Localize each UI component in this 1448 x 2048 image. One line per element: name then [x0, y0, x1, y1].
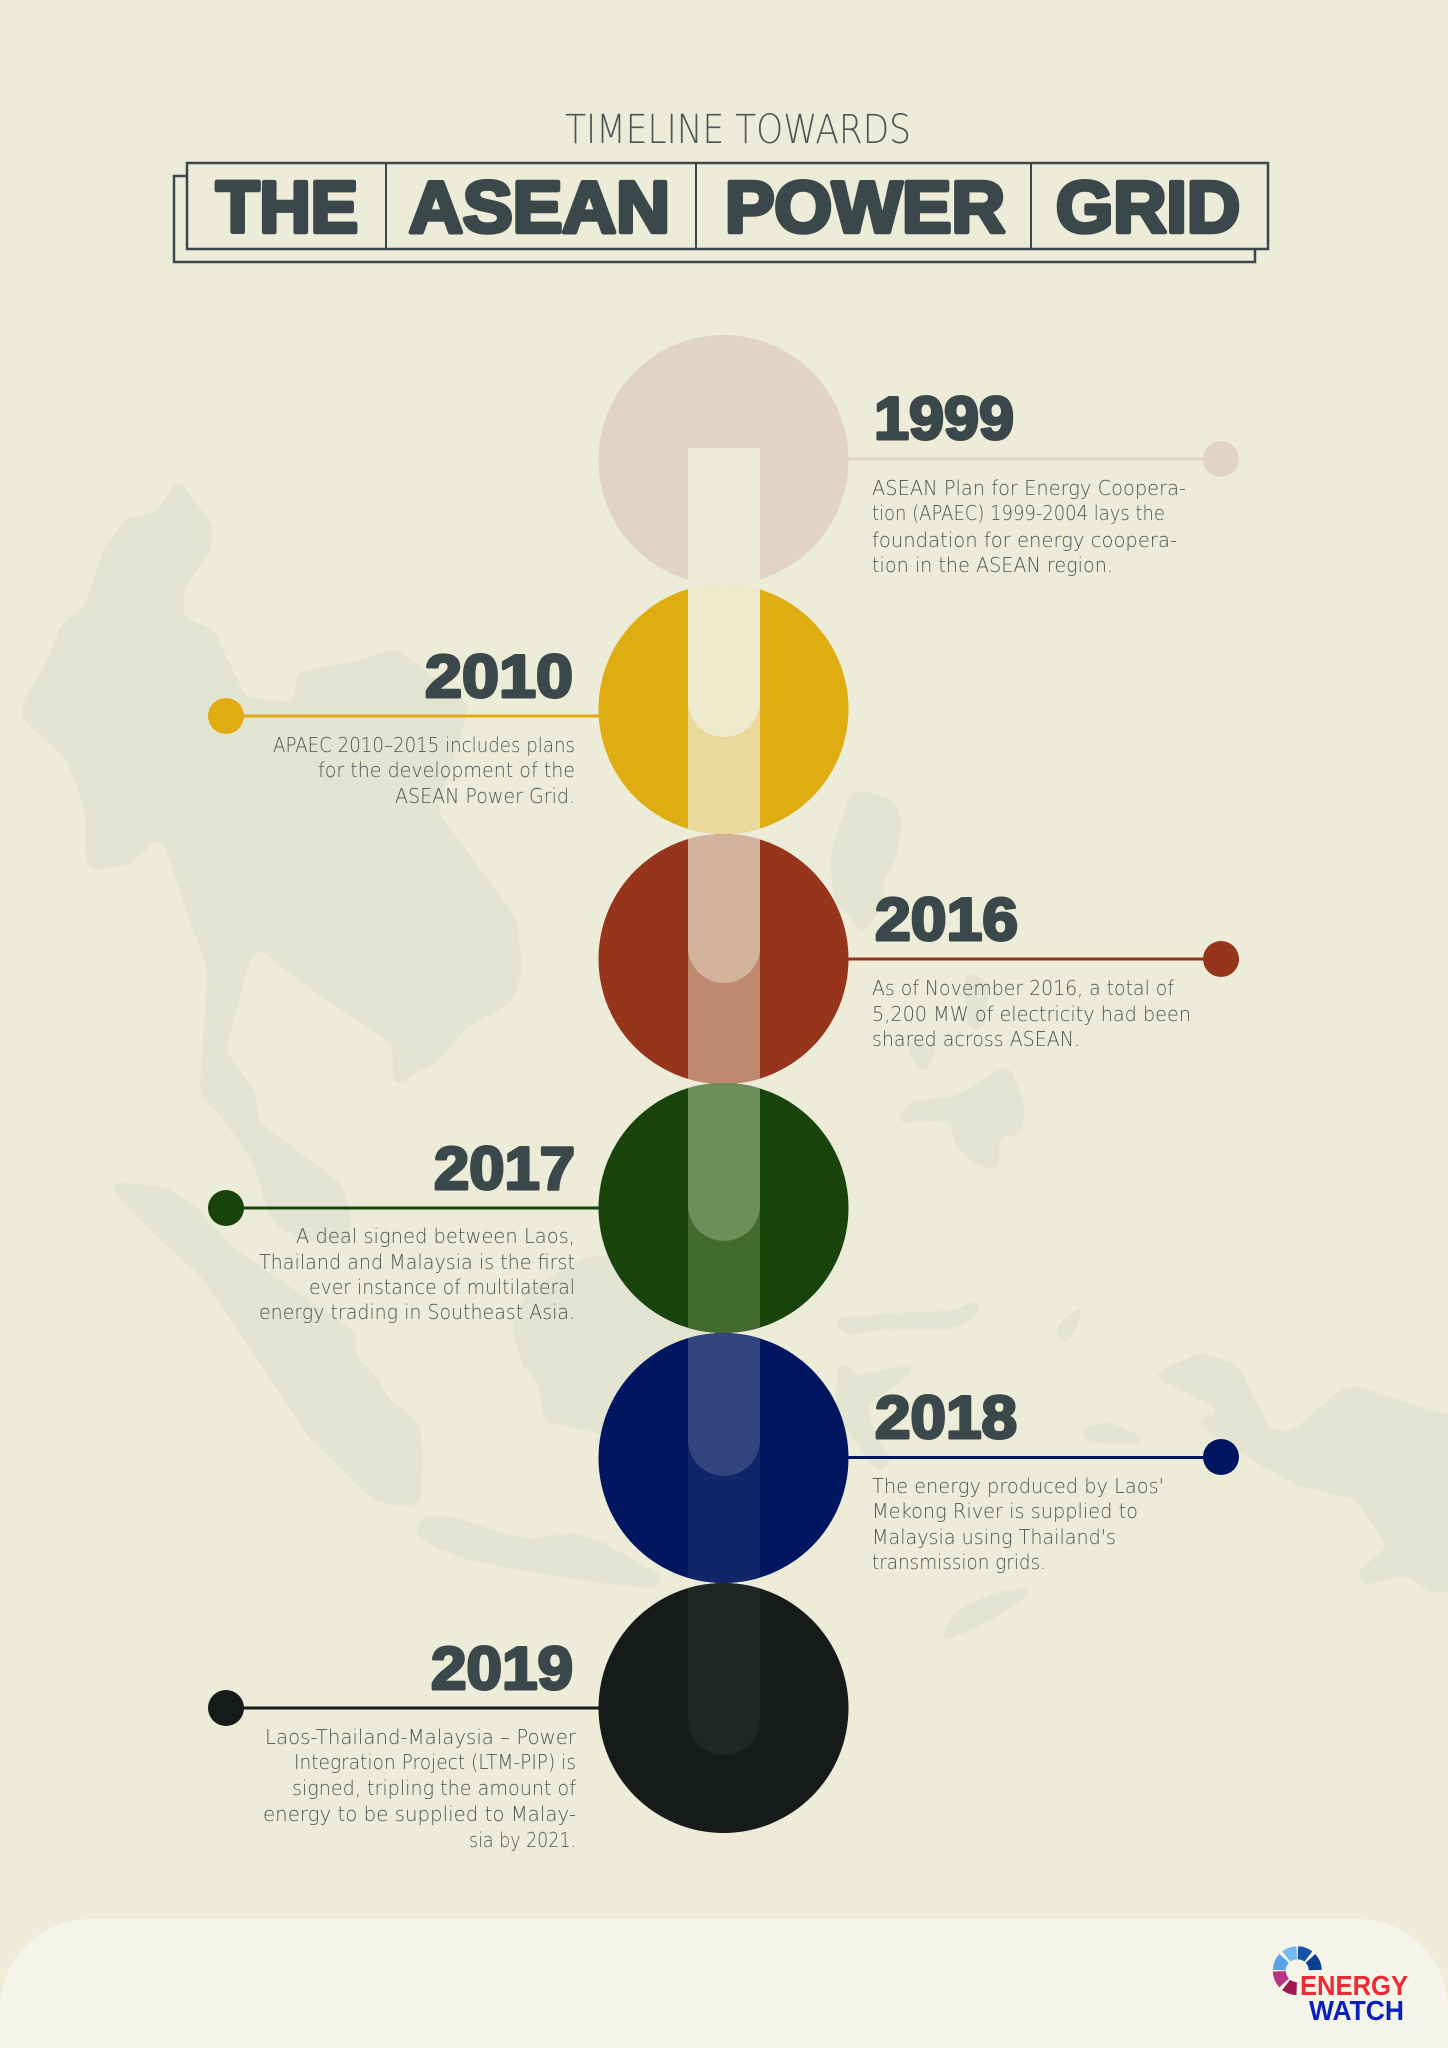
- description: 5,200 MW of electricity had been: [872, 1002, 1191, 1026]
- title word: THE: THE: [216, 168, 358, 248]
- connector line: [240, 1206, 602, 1210]
- timeline circle: [598, 1333, 848, 1583]
- map: Flores sliver: [943, 1589, 1032, 1640]
- end dot: [1203, 941, 1239, 977]
- logo ring icon: [1279, 1953, 1315, 1989]
- end dot: [1203, 441, 1239, 477]
- map: Borneo: [514, 1259, 720, 1440]
- connector line: [240, 1706, 602, 1710]
- milestone 2010: [208, 570, 848, 834]
- description: [263, 1725, 577, 1852]
- footer panel: [0, 1919, 1448, 2048]
- description: ASEAN Plan for Energy Coopera-: [872, 476, 1186, 500]
- description: [273, 733, 575, 808]
- connector line: [848, 1456, 1208, 1459]
- timeline circle: [598, 584, 848, 834]
- map: Java: [417, 1517, 660, 1586]
- capsule overlay: [688, 820, 760, 983]
- title banner: [174, 163, 1268, 262]
- description: [259, 1224, 575, 1324]
- description: Mekong River is supplied to: [872, 1499, 1138, 1523]
- banner dividers: [386, 163, 1031, 249]
- timeline circle: [598, 1083, 848, 1333]
- end dot: [1203, 1439, 1239, 1475]
- map: Panay island: [908, 1045, 935, 1072]
- connector line: [848, 958, 1208, 960]
- logo wordmark bottom: WATCH: [1309, 1995, 1404, 2026]
- year: 1999: [874, 385, 1014, 452]
- end dot: [208, 1190, 244, 1226]
- map: Luzon: [833, 793, 900, 931]
- capsule overlay: [688, 570, 760, 737]
- title eyebrow: TIMELINE TOWARDS: [565, 107, 911, 153]
- description: [872, 476, 1186, 577]
- description: energy to be supplied to Malay-: [263, 1802, 576, 1826]
- lower band: [688, 834, 760, 1084]
- description: Malaysia using Thailand's: [872, 1525, 1116, 1549]
- banner front frame: [187, 163, 1268, 249]
- description: As of November 2016, a total of: [872, 976, 1174, 1000]
- milestone 1999: [598, 335, 1239, 580]
- end dot: [208, 698, 244, 734]
- logo wordmark top: ENERGY: [1300, 1970, 1408, 2001]
- description: Laos-Thailand-Malaysia – Power: [265, 1725, 577, 1749]
- description: tion (APAEC) 1999-2004 lays the: [872, 501, 1165, 525]
- year: 2017: [434, 1135, 575, 1202]
- description: ASEAN Power Grid.: [395, 784, 575, 808]
- capsule overlay: [688, 1570, 760, 1755]
- capsule overlay: [688, 448, 760, 584]
- map: Mindanao: [898, 1068, 1022, 1169]
- timeline circle: [598, 335, 848, 585]
- timeline circle: [598, 834, 848, 1084]
- description: tion in the ASEAN region.: [872, 553, 1113, 577]
- milestone 2016: [598, 820, 1239, 1084]
- description: ever instance of multilateral: [309, 1275, 575, 1299]
- map: small central islands: [966, 973, 987, 1028]
- timeline circle: [598, 1583, 848, 1833]
- logo: Energy Watch: [1279, 1953, 1408, 2026]
- milestone 2017: [208, 1070, 848, 1333]
- description: Thailand and Malaysia is the first: [259, 1250, 575, 1274]
- year: 2018: [875, 1384, 1017, 1451]
- lower band: [688, 1083, 760, 1333]
- map: Seram sliver: [1082, 1424, 1146, 1442]
- description: Integration Project (LTM-PIP) is: [294, 1750, 576, 1774]
- description: signed, tripling the amount of: [292, 1776, 576, 1800]
- banner back frame: [174, 176, 1255, 262]
- year: 2016: [875, 886, 1018, 953]
- map: Palawan streak: [1057, 1305, 1083, 1344]
- title word: POWER: POWER: [725, 168, 1005, 248]
- milestone 2019: [208, 1570, 848, 1852]
- year: 2019: [431, 1635, 573, 1702]
- connector line: [240, 714, 602, 718]
- map: mainland and peninsula: [24, 482, 520, 1240]
- capsule overlay: [688, 1320, 760, 1476]
- description: transmission grids.: [872, 1550, 1046, 1574]
- description: for the development of the: [318, 758, 575, 782]
- description: The energy produced by Laos': [872, 1474, 1164, 1498]
- map: Sulawesi: [838, 1363, 914, 1470]
- year: 2010: [425, 643, 573, 710]
- map: long northern strip: [835, 1301, 980, 1333]
- description: shared across ASEAN.: [872, 1027, 1080, 1051]
- end dot: [208, 1690, 244, 1726]
- connector line: [848, 458, 1208, 460]
- description: sia by 2021.: [469, 1828, 576, 1852]
- title word: GRID: GRID: [1056, 168, 1240, 248]
- description: foundation for energy coopera-: [872, 528, 1177, 552]
- background map of Southeast Asia: [24, 482, 1448, 1640]
- description: A deal signed between Laos,: [296, 1224, 575, 1248]
- lower band: [688, 1333, 760, 1583]
- map: New Guinea: [1156, 1355, 1448, 1590]
- description: [872, 1474, 1164, 1574]
- description: APAEC 2010–2015 includes plans: [273, 733, 575, 757]
- map: Sumatra: [112, 1184, 420, 1504]
- title word: ASEAN: ASEAN: [409, 168, 670, 248]
- description: [872, 976, 1191, 1051]
- lower band: [688, 584, 760, 834]
- capsule overlay: [688, 1070, 760, 1241]
- milestone 2018: [598, 1320, 1239, 1583]
- description: energy trading in Southeast Asia.: [259, 1300, 575, 1324]
